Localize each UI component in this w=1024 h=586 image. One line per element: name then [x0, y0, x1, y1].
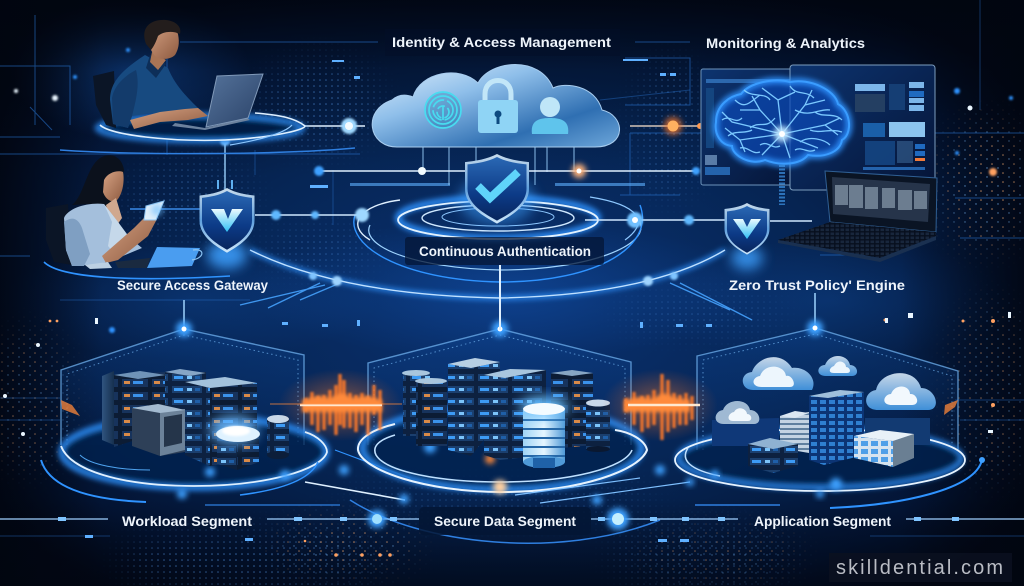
icon: glowing brain: [716, 80, 849, 205]
watermark: [829, 553, 1012, 582]
servers: workload segment: [102, 369, 289, 470]
panel: workload segment enclosure: [61, 300, 304, 445]
panel: secure data segment enclosure: [368, 321, 631, 445]
identity cloud with icons: [372, 64, 620, 147]
icon: central check shield: [459, 154, 535, 224]
connector: gateway to authentication: [130, 208, 369, 222]
ring: application segment: [675, 428, 985, 508]
ring: secure data segment: [350, 406, 694, 543]
label backing: secure data segment: [419, 507, 591, 535]
label backing: continuous authentication: [405, 237, 604, 265]
label: application segment: Application Segment: [754, 513, 891, 529]
icon: cloud top left: [743, 357, 814, 390]
label: secure access gateway: Secure Access Gateway: [117, 277, 268, 293]
icon: fingerprint: [425, 92, 461, 128]
icon: access gateway shield: [200, 180, 254, 269]
icon: policy engine shield: [724, 203, 770, 270]
icon: padlock: [478, 80, 518, 133]
connector: cloud to analytics: [630, 117, 715, 135]
person: man with laptop: [60, 20, 355, 154]
label: continuous authentication: Continuous Authentication: [419, 243, 591, 259]
panel: application segment enclosure: [697, 293, 958, 450]
icon: user: [532, 97, 568, 134]
ring: workload segment: [41, 416, 410, 505]
icon: cloud right: [866, 373, 936, 410]
ring: continuous authentication: [358, 197, 638, 240]
heading: monitoring & analytics: Monitoring & Analytics: [706, 35, 865, 51]
cloud connectors: [314, 147, 700, 185]
laptop: analytics: [778, 171, 937, 262]
label: secure data segment: Secure Data Segment: [434, 513, 576, 529]
monitor: analytics left screen: [701, 69, 801, 185]
cloud body: [372, 64, 620, 147]
label: zero trust policy engine: Zero Trust Policy' Engine: [729, 277, 905, 293]
buildings and clouds: application segment: [712, 356, 936, 473]
orange signal: left: [270, 369, 402, 441]
label: workload segment: Workload Segment: [122, 513, 252, 529]
connector: user to identity cloud: [220, 118, 365, 190]
person: woman with phone: [44, 155, 230, 279]
connector: authentication to policy engine: [585, 212, 812, 228]
icon: cloud left: [716, 401, 759, 424]
watermark: skilldential.com: [836, 557, 1003, 579]
bottom data bus: [0, 508, 1024, 530]
orange signal: right: [602, 369, 718, 441]
servers: secure data segment: [402, 358, 610, 468]
monitor: analytics right screen: [790, 65, 935, 190]
central network arcs: [240, 205, 752, 330]
label backing: identity: [385, 29, 620, 56]
icon: cloud top right: [818, 356, 857, 376]
heading: identity & access management: Identity & Access Management: [392, 34, 611, 50]
